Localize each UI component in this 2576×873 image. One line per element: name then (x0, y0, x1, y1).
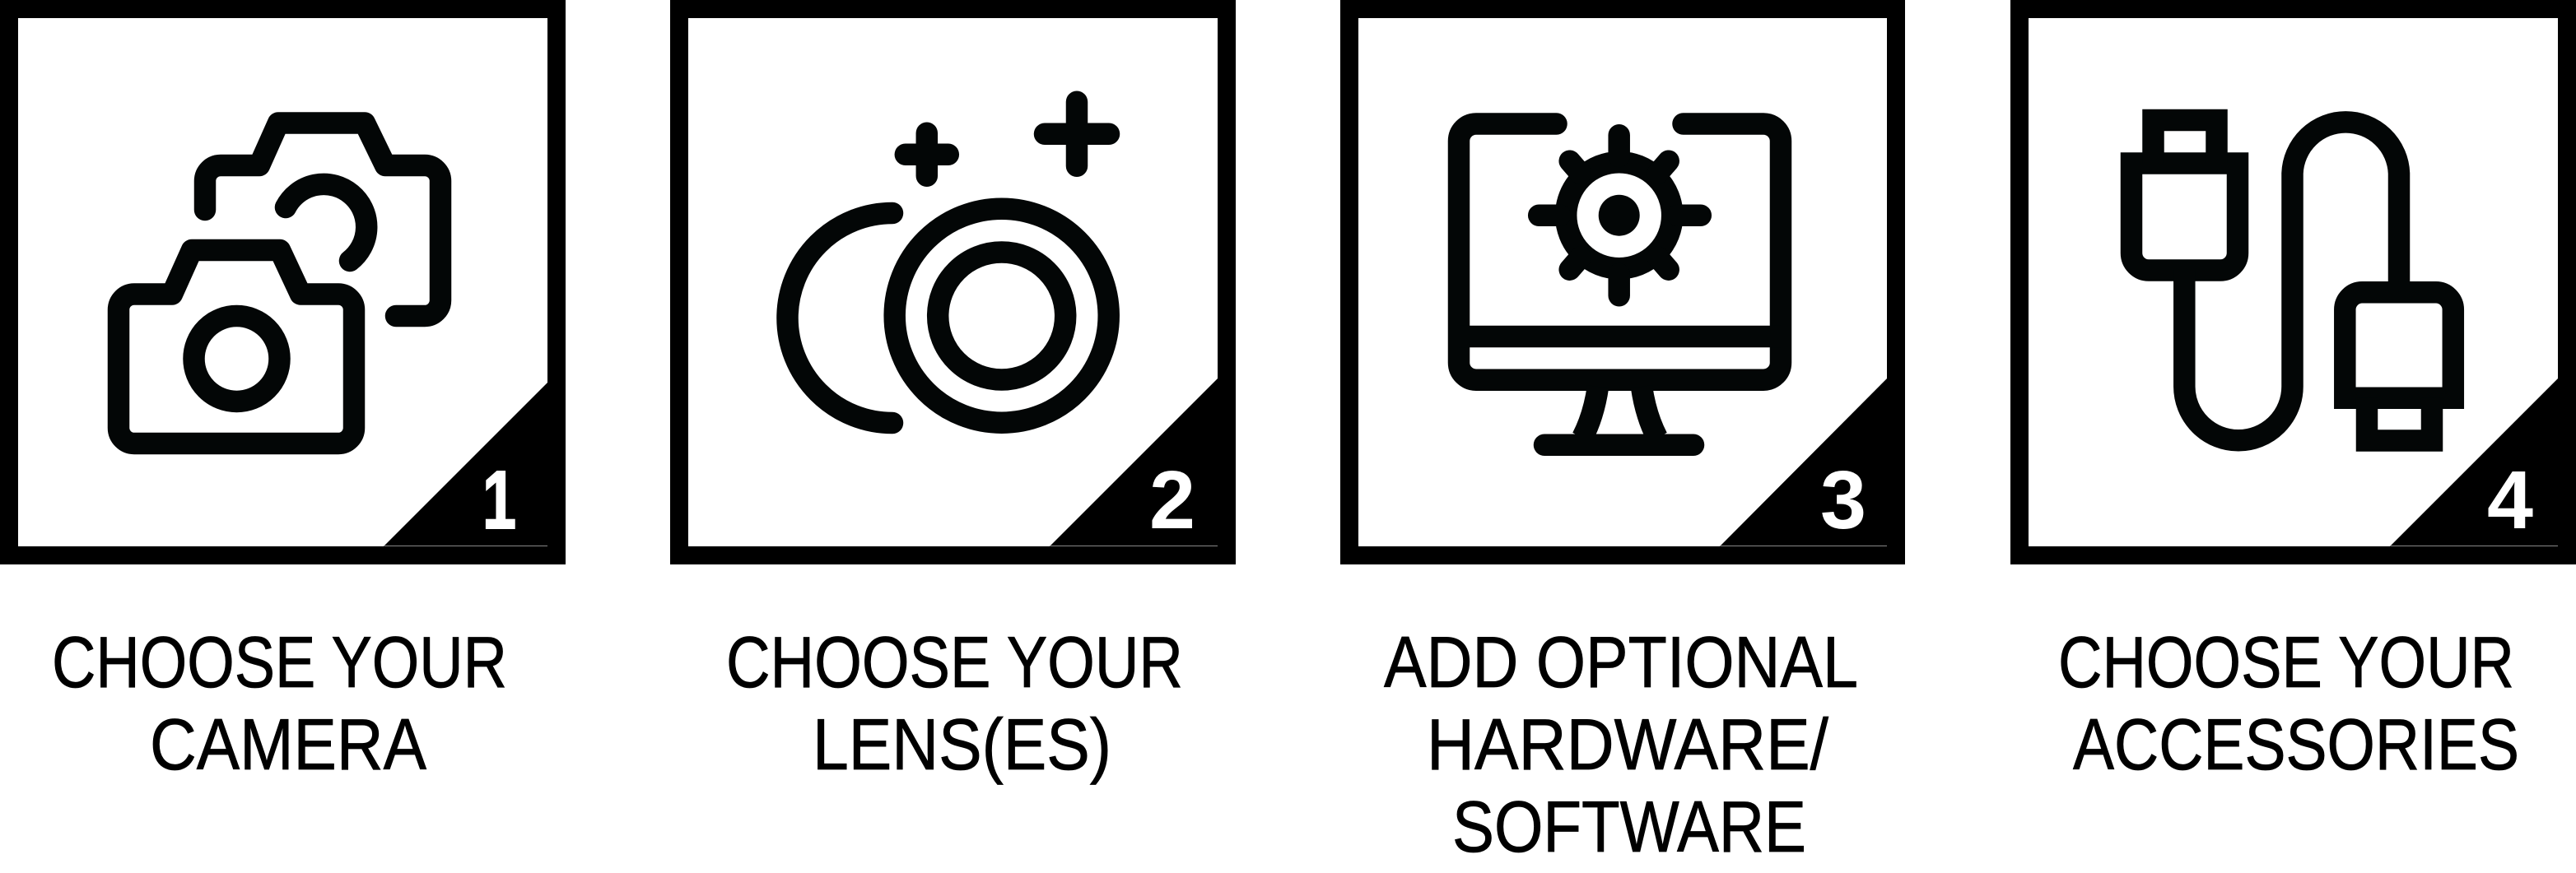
number 4: 4 (2487, 454, 2533, 546)
frame 2 (679, 9, 1227, 555)
label: choose your lenses: LENS(ES) (813, 704, 1111, 785)
label: choose your lenses: CHOOSE YOUR (726, 621, 1183, 703)
number 2: 2 (1149, 454, 1195, 546)
corner badge 3 (1720, 378, 1887, 546)
corner badge 4 (2390, 378, 2558, 546)
icon: two cameras (119, 123, 440, 443)
corner badge 2 (1050, 378, 1218, 546)
label: choose your camera: CHOOSE YOUR (52, 621, 507, 703)
panel: step 1 choose your camera (9, 9, 557, 785)
label: add optional hardware software: ADD OPTIONAL (1384, 621, 1858, 703)
label: choose your camera: CAMERA (150, 704, 426, 785)
corner badge 1 (384, 383, 547, 546)
panel: step 3 add optional hardware and software (1349, 9, 1896, 867)
icon: monitor with gear (1459, 123, 1781, 445)
number 1: 1 (482, 454, 516, 546)
label: choose your accessories (2058, 621, 2519, 785)
frame 3 (1349, 9, 1896, 555)
label: add optional hardware software: SOFTWARE (1452, 786, 1806, 867)
number 3: 3 (1820, 454, 1866, 546)
icon: cable with two plugs (2131, 120, 2453, 441)
label: choose your camera (52, 621, 507, 785)
label: choose your lenses (726, 621, 1183, 785)
icon: lenses with plus signs (788, 102, 1109, 423)
label: add optional hardware software (1384, 621, 1858, 867)
frame 1 (9, 9, 557, 555)
panel: step 4 choose your accessories (2019, 9, 2567, 785)
frame 4 (2019, 9, 2567, 555)
label: add optional hardware software: HARDWARE/ (1427, 704, 1829, 785)
panel: step 2 choose your lenses (679, 9, 1227, 785)
